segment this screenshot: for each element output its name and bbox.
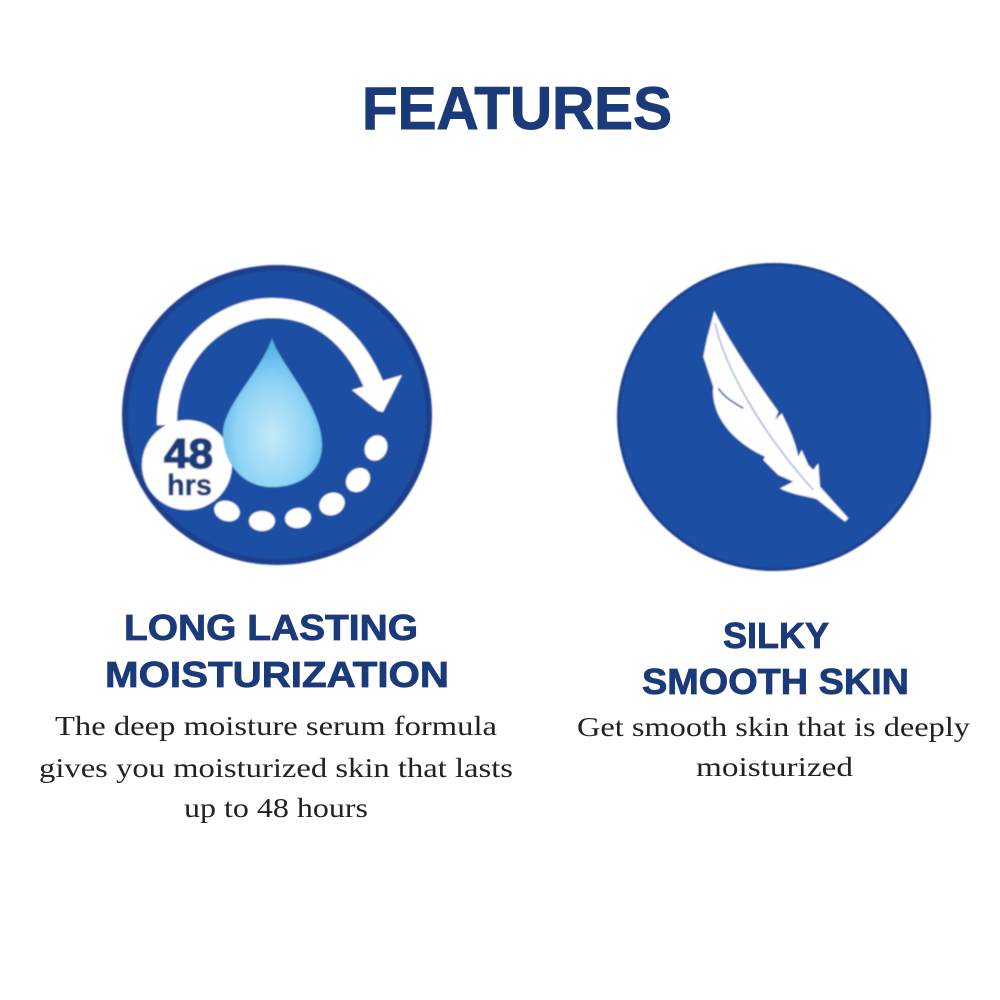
heading: long lasting moisturization (105, 607, 449, 695)
icon: long lasting moisture badge (122, 265, 432, 565)
text: long lasting description: The deep moisture serum formula (55, 711, 497, 741)
icon: 48 hrs badge: 48 (164, 430, 213, 477)
heading: long lasting moisturization: LONG LASTING (124, 607, 418, 648)
icon: 48 hrs badge: hrs (167, 469, 212, 502)
text: long lasting description (39, 711, 513, 823)
text: silky smooth description: moisturized (696, 752, 854, 782)
icon: silky smooth badge (617, 263, 931, 571)
icon: progress dots (212, 432, 391, 531)
text: silky smooth description (577, 712, 971, 782)
icon: water drop (223, 338, 322, 487)
icon: 48 hrs badge (142, 420, 232, 510)
title: FEATURES (362, 75, 672, 142)
heading: silky smooth skin: SMOOTH SKIN (642, 661, 909, 702)
text: silky smooth description: Get smooth skin that is deeply (577, 712, 971, 742)
text: long lasting description: gives you moisturized skin that lasts (39, 753, 513, 783)
heading: silky smooth skin: SILKY (723, 615, 829, 656)
icon: circular arrow (167, 308, 402, 425)
heading: long lasting moisturization: MOISTURIZATION (105, 654, 449, 695)
heading: silky smooth skin (642, 615, 909, 702)
text: long lasting description: up to 48 hours (184, 793, 368, 823)
icon: feather (703, 311, 848, 522)
